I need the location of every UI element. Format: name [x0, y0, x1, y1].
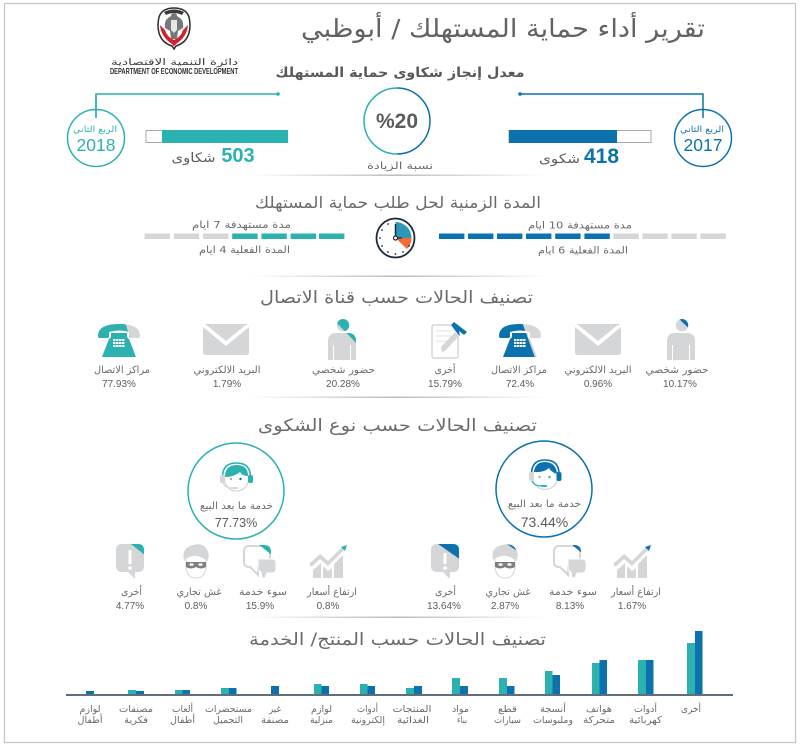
segmented bar 2018	[145, 234, 344, 239]
icon: alert bubble teal	[116, 544, 144, 579]
panel: complaint types 2017	[427, 441, 661, 612]
connector 2018	[96, 94, 278, 118]
category labels: كهربائية	[629, 715, 663, 726]
chart axis	[66, 694, 733, 696]
price rise 2018: 0.8%	[317, 601, 340, 612]
icon: envelope	[575, 324, 621, 355]
poor service 2018: 15.9%	[246, 601, 274, 612]
other 2017: أخرى	[434, 363, 456, 376]
category labels: بناء	[457, 715, 467, 726]
title: تقرير أداء حماية المستهلك / أبوظبي	[301, 11, 705, 44]
callout: after sales 2017: 73.44%	[521, 514, 568, 530]
category labels: أدوات	[357, 702, 378, 715]
email 2017: البريد الالكتروني	[564, 365, 632, 376]
value 418 complaint	[539, 145, 619, 168]
call centres 2017: 72.4%	[506, 379, 534, 390]
heading: cases by contact channel: تصنيف الحالات حسب قناة الاتصال	[260, 288, 533, 308]
icon: note and pencil	[432, 322, 467, 358]
badge: Q2 2018	[68, 94, 124, 166]
price rise 2018	[306, 545, 357, 612]
category labels: غير	[268, 704, 281, 715]
call centres 2017: مراكز الاتصال	[491, 365, 547, 376]
icon: phone blue	[499, 324, 541, 357]
callout: after sales 2018: خدمة ما بعد البيع	[200, 501, 273, 512]
category labels: مستحضرات	[205, 704, 252, 715]
other 2017: أخرى	[435, 585, 456, 598]
target days 2017: مدة مستهدفة 10 ايام	[528, 220, 632, 232]
email 2018	[194, 324, 260, 390]
category labels: إلكترونية	[351, 715, 385, 726]
category labels: مصنفة	[261, 715, 289, 726]
category labels: أطفال	[78, 713, 103, 726]
fraud 2018: غش تجاري	[176, 587, 222, 598]
increase label: نسبة الزيادة	[367, 161, 433, 172]
callout: after sales 2018: 77.73%	[215, 516, 257, 530]
poor service 2018: سوء خدمة	[239, 587, 287, 598]
other 2017	[427, 544, 461, 612]
in person 2018: 20.28%	[326, 379, 360, 390]
category labels: المنتجات	[392, 704, 432, 715]
panel: contact channels 2017	[428, 319, 708, 390]
badge: Q2 2018: 2018	[77, 135, 115, 155]
call centres 2017	[491, 324, 547, 390]
badge: Q2 2017: 2017	[684, 135, 722, 155]
actual days 2017: المدة الفعلية 6 ايام	[538, 246, 628, 256]
category labels: لوازم	[311, 704, 332, 715]
fraud 2017: غش تجاري	[486, 587, 530, 598]
connector dot 2017	[518, 92, 522, 96]
panel: complaints comparison	[68, 88, 732, 172]
category labels: الغذائية	[397, 715, 429, 726]
other 2017: 13.64%	[427, 601, 461, 612]
bar chart: product and service	[66, 631, 733, 726]
badge: Q2 2018: الربع الثاني	[73, 125, 117, 135]
increase ring 20%	[364, 88, 430, 154]
logo english name: DEPARTMENT OF ECONOMIC DEVELOPMENT	[110, 67, 238, 76]
category labels: فكرية	[124, 715, 148, 726]
category labels: أدوات	[634, 702, 657, 715]
bars	[86, 631, 702, 695]
call centres 2018	[94, 324, 150, 390]
icon: masked face teal	[183, 544, 209, 578]
price rise 2017: ارتفاع أسعار	[610, 585, 661, 598]
fraud 2018	[176, 544, 222, 612]
value 503 complaints: شكاوى	[172, 151, 216, 166]
badge: Q2 2017: الربع الثاني	[680, 125, 724, 135]
other 2017	[428, 322, 467, 390]
icon: alert bubble blue	[431, 544, 459, 579]
call centres 2018: 77.93%	[102, 379, 136, 390]
heading: resolution time: المدة الزمنية لحل طلب حماية المستهلك	[255, 193, 541, 213]
email 2017	[564, 324, 632, 390]
panel: resolution time 2017	[439, 220, 726, 256]
heading: cases by complaint type: تصنيف الحالات حسب نوع الشكوى	[258, 416, 537, 436]
category labels: أنسجة	[540, 702, 566, 715]
heading: complaint completion rate: معدل إنجاز شكاوى حماية المستهلك	[276, 65, 524, 81]
callout: after sales 2017: خدمة ما بعد البيع	[508, 499, 581, 510]
icon: rising chart teal	[309, 545, 347, 578]
other 2018: 4.77%	[116, 601, 144, 612]
other 2018: أخرى	[121, 585, 142, 598]
icon: envelope	[203, 324, 249, 355]
category labels: أطفال	[170, 713, 195, 726]
value 503 complaints	[172, 145, 255, 167]
in person 2017	[646, 319, 708, 390]
icon: person teal	[328, 319, 356, 360]
in person 2018	[312, 319, 375, 390]
callout: after sales 2018	[188, 443, 284, 539]
icon: crest	[158, 8, 190, 49]
price rise 2017	[610, 545, 661, 612]
price rise 2018: ارتفاع أسعار	[306, 585, 357, 598]
poor service 2017: سوء خدمة	[549, 587, 597, 598]
target days 2018: مدة مستهدفة 7 ايام	[192, 220, 291, 231]
email 2017: 0.96%	[584, 379, 612, 390]
category labels: ألعاب	[172, 702, 193, 715]
icon: clock	[376, 218, 414, 258]
bar 2018	[146, 130, 288, 143]
icon: agent blue	[529, 460, 562, 490]
poor service 2018	[239, 545, 287, 612]
price rise 2017: 1.67%	[618, 601, 646, 612]
fraud 2018: 0.8%	[185, 601, 208, 612]
icon: thumbs down blue	[553, 545, 586, 578]
fraud 2017	[486, 544, 530, 612]
email 2018: 1.79%	[213, 379, 241, 390]
category labels: مصنفات	[119, 704, 153, 715]
value 418 complaint: شكوى	[539, 152, 580, 167]
other 2018	[116, 544, 144, 612]
icon: person blue	[667, 319, 695, 360]
panel: contact channels 2018	[94, 319, 375, 390]
connector 2017	[520, 94, 703, 118]
panel: complaint types 2018	[116, 443, 357, 612]
logo: department of economic development	[110, 8, 238, 76]
poor service 2017: 8.13%	[556, 601, 584, 612]
badge: Q2 2017	[674, 110, 732, 166]
poor service 2017	[549, 545, 597, 612]
fraud 2017: 2.87%	[491, 601, 519, 612]
value 418 complaint: 418	[584, 145, 619, 168]
call centres 2018: مراكز الاتصال	[94, 365, 150, 376]
icon: agent teal	[220, 463, 253, 491]
panel: resolution time 2018	[145, 220, 344, 256]
value 503 complaints: 503	[221, 145, 255, 167]
icon: rising chart blue	[613, 545, 651, 578]
category labels: منزلية	[310, 715, 333, 726]
category labels: أخرى	[681, 702, 701, 715]
category labels: قطع	[498, 704, 517, 715]
category labels: مواد	[452, 704, 469, 715]
increase ring 20%: %20	[376, 110, 418, 133]
other 2017: 15.79%	[428, 379, 462, 390]
heading: cases by product or service: تصنيف الحالات حسب المنتج/ الخدمة	[249, 630, 546, 650]
icon: thumbs down teal	[243, 545, 276, 578]
connector dot 2018	[276, 92, 280, 96]
category labels: التجميل	[213, 715, 243, 726]
logo arabic name: دائرة التنمية الاقتصادية	[111, 58, 238, 68]
in person 2017: حضور شخصي	[646, 365, 708, 376]
category labels: متحركة	[583, 715, 615, 726]
in person 2018: حضور شخصي	[312, 365, 375, 376]
bar 2017	[509, 130, 651, 143]
category labels	[78, 702, 701, 726]
icon: phone teal	[98, 324, 140, 357]
callout: after sales 2017	[496, 441, 592, 537]
actual days 2018: المدة الفعلية 4 ايام	[199, 245, 290, 256]
email 2018: البريد الالكتروني	[194, 365, 260, 376]
category labels: وملبوسات	[533, 715, 573, 726]
icon: masked face blue	[492, 544, 518, 578]
category labels: سيارات	[494, 715, 521, 726]
category labels: لوازم	[80, 704, 100, 715]
in person 2017: 10.17%	[663, 379, 697, 390]
segmented bar 2017	[439, 234, 726, 239]
category labels: هواتف	[586, 704, 612, 715]
